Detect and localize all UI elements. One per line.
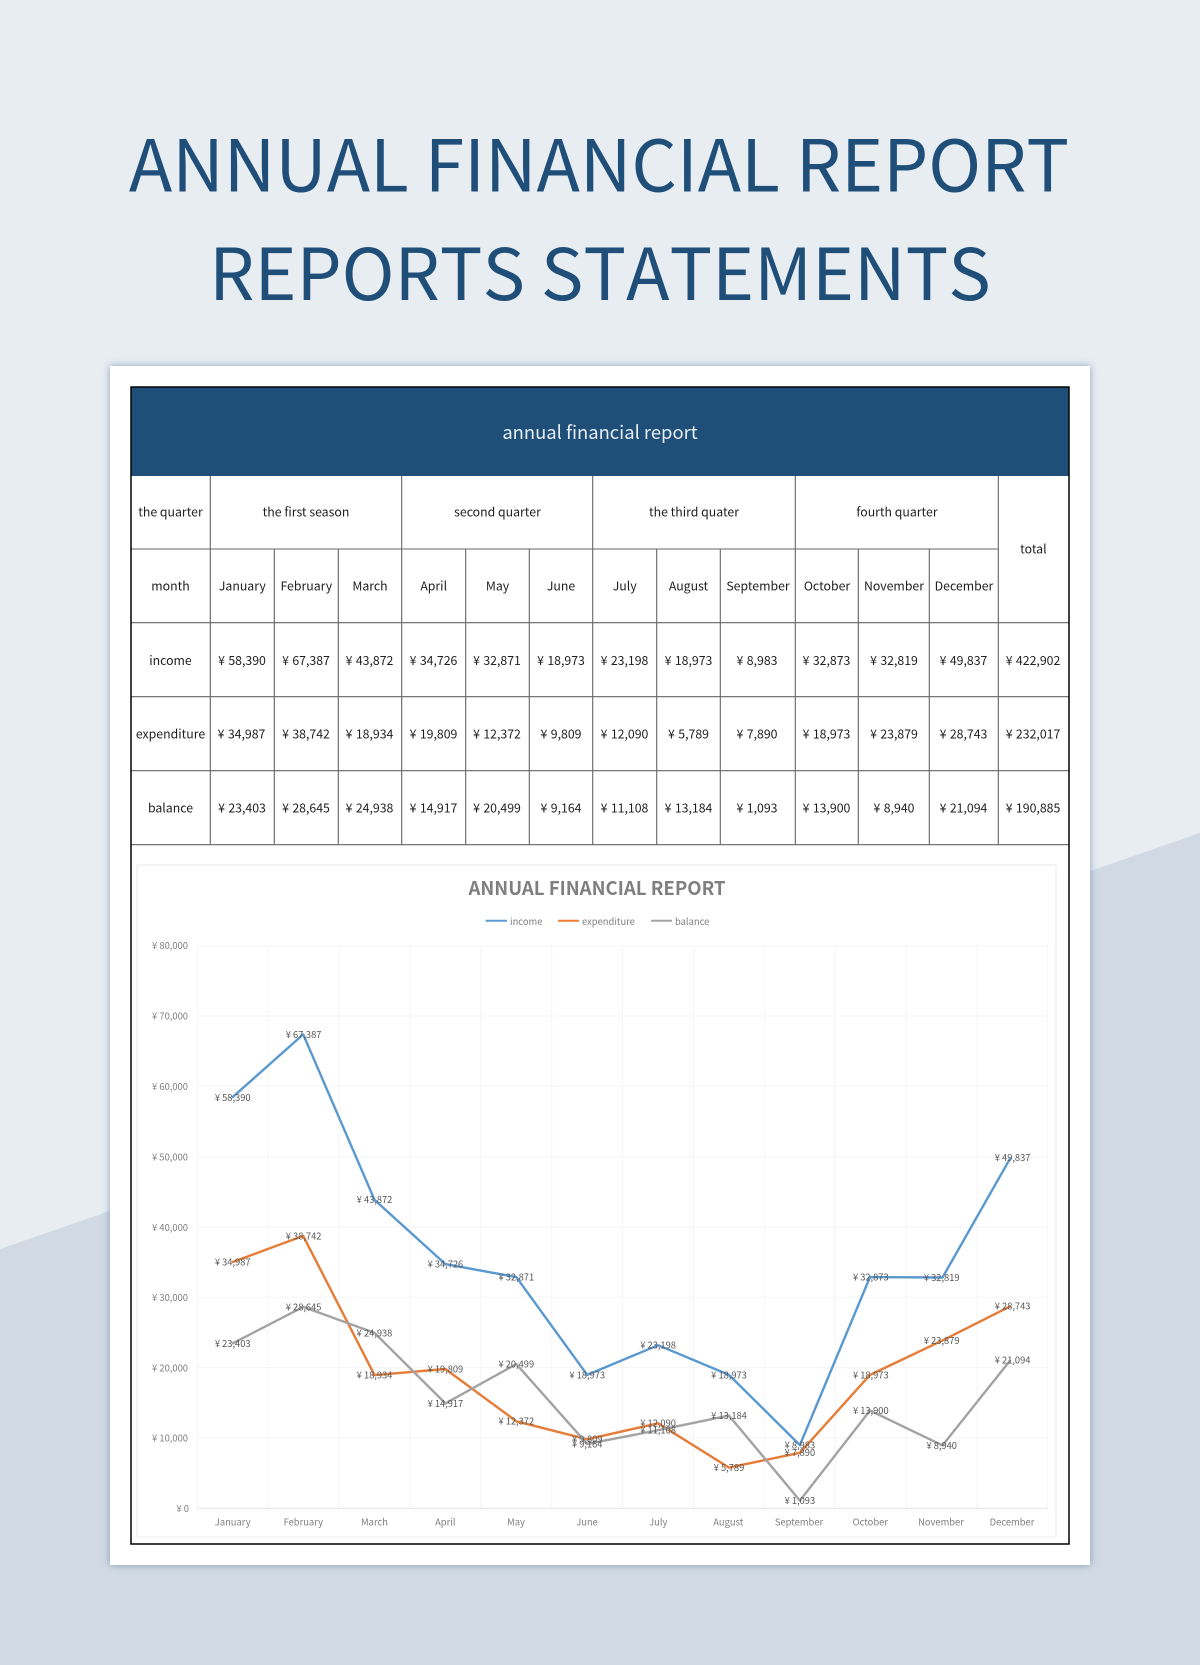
y axis labels: ¥20,000 [152,1361,188,1375]
month row: May [486,577,510,595]
title [129,109,1069,321]
expenditure row: ¥ 232,017 [1006,725,1060,743]
income row: ¥ 34,726 [410,651,458,669]
income row: ¥ 8,983 [737,651,778,669]
expenditure row: ¥ 28,743 [940,725,988,743]
data labels: balance: ¥21,094 [995,1352,1030,1366]
x axis labels: July [649,1514,668,1528]
month row [151,577,994,595]
y axis labels: ¥70,000 [152,1009,188,1023]
month row: July [613,577,637,595]
expenditure row: ¥ 18,973 [803,725,851,743]
data labels: balance: ¥1,093 [785,1493,815,1507]
expenditure row: ¥ 12,372 [473,725,521,743]
expenditure row: ¥ 9,809 [541,725,582,743]
income row: ¥ 23,198 [601,651,649,669]
balance row: balance [148,799,193,817]
title: REPORTS STATEMENTS [209,217,991,321]
month row: March [352,577,388,595]
balance row: ¥ 21,094 [940,799,988,817]
data labels: income [215,1027,1030,1452]
x axis labels: December [990,1514,1035,1528]
x axis labels: April [435,1514,456,1528]
quarter row: the third quater [649,503,739,521]
y axis labels: ¥10,000 [152,1431,188,1445]
x axis labels [215,1514,1035,1528]
income row: ¥ 32,871 [473,651,521,669]
data labels: balance [215,1299,1030,1507]
x axis labels: September [775,1514,824,1528]
y axis labels: ¥40,000 [152,1220,188,1234]
x axis labels: March [361,1514,388,1528]
balance row: ¥ 9,164 [541,799,582,817]
balance row: ¥ 11,108 [601,799,649,817]
month row: September [726,577,790,595]
balance row: ¥ 24,938 [346,799,394,817]
quarter row: the first season [263,503,349,521]
chart title: ANNUAL FINANCIAL REPORT [467,874,726,901]
month row: month [151,577,190,595]
panel: report card [110,366,1090,1565]
month row: August [669,577,709,595]
expenditure row: ¥ 19,809 [410,725,458,743]
data labels: expenditure: ¥19,809 [428,1361,463,1375]
quarter row: the quarter [138,503,203,521]
data labels: expenditure: ¥12,090 [640,1416,676,1430]
chart legend: income [510,914,542,928]
expenditure row: ¥ 12,090 [601,725,649,743]
expenditure row: ¥ 7,890 [737,725,778,743]
balance row: ¥ 1,093 [737,799,778,817]
data labels: balance: ¥13,900 [853,1403,889,1417]
data labels: income: ¥23,198 [640,1338,676,1352]
series: expenditure [232,1236,1010,1468]
data labels: income: ¥18,973 [569,1367,605,1381]
data labels: income: ¥43,872 [357,1192,392,1206]
balance row: ¥ 13,184 [665,799,713,817]
balance row [148,799,1060,817]
x axis labels: October [853,1514,888,1528]
month row: January [219,577,266,595]
x axis labels: May [507,1514,525,1528]
income row: ¥ 32,873 [803,651,851,669]
month row: October [804,577,850,595]
data labels: income: ¥49,837 [995,1150,1030,1164]
chart legend: balance [675,914,709,928]
data labels: expenditure: ¥7,890 [785,1445,815,1459]
balance row: ¥ 23,403 [218,799,266,817]
expenditure row: expenditure [136,725,205,743]
balance row: ¥ 190,885 [1006,799,1060,817]
income row: ¥ 18,973 [665,651,713,669]
month row: April [420,577,447,595]
y axis labels: ¥30,000 [152,1290,188,1304]
chart legend [486,914,709,928]
income row: ¥ 422,902 [1006,651,1060,669]
data labels: balance: ¥9,164 [572,1436,602,1450]
expenditure row: ¥ 18,934 [346,725,394,743]
income row: ¥ 18,973 [537,651,585,669]
expenditure row: ¥ 34,987 [218,725,266,743]
title: ANNUAL FINANCIAL REPORT [129,109,1069,213]
data labels: income: ¥34,726 [428,1256,463,1270]
data labels: balance: ¥23,403 [215,1336,251,1350]
income row: ¥ 58,390 [218,651,266,669]
y axis labels: ¥0 [176,1501,189,1515]
data labels: income: ¥18,973 [711,1367,747,1381]
balance row: ¥ 28,645 [282,799,330,817]
chart legend: expenditure [582,914,635,928]
data labels: expenditure: ¥18,973 [853,1367,889,1381]
data labels: expenditure: ¥34,987 [215,1255,251,1269]
expenditure row: ¥ 5,789 [668,725,709,743]
quarter row: fourth quarter [856,503,938,521]
table banner: annual financial report [502,419,698,445]
data labels: expenditure: ¥28,743 [995,1299,1030,1313]
y axis labels: ¥60,000 [152,1079,188,1093]
balance row: ¥ 14,917 [410,799,458,817]
line chart [137,865,1056,1537]
data labels: expenditure: ¥18,934 [357,1368,392,1382]
data labels: balance: ¥28,645 [286,1299,321,1313]
income row: ¥ 32,819 [870,651,918,669]
income row: ¥ 43,872 [346,651,394,669]
balance row: ¥ 13,900 [803,799,851,817]
data labels: expenditure [215,1228,1030,1474]
data labels: balance: ¥11,108 [640,1423,676,1437]
month row: February [280,577,333,595]
month row: December [935,577,994,595]
x axis labels: January [215,1514,251,1528]
data labels: expenditure: ¥9,809 [572,1432,602,1446]
x axis labels: August [713,1514,744,1528]
data labels: income: ¥8,983 [785,1438,815,1452]
income row [149,651,1060,669]
quarter row: second quarter [454,503,541,521]
data labels: income: ¥67,387 [286,1027,321,1041]
data labels: expenditure: ¥23,879 [924,1333,960,1347]
data labels: income: ¥32,871 [498,1270,534,1284]
data labels: expenditure: ¥5,789 [714,1460,744,1474]
table grid [131,476,1069,845]
data labels: income: ¥32,819 [924,1270,960,1284]
x axis labels: February [284,1514,323,1528]
income row: ¥ 67,387 [282,651,330,669]
series: income [232,1034,1010,1445]
expenditure row: ¥ 38,742 [282,725,330,743]
y axis labels [152,938,189,1515]
data labels: balance: ¥8,940 [926,1438,957,1452]
y axis labels: ¥80,000 [152,938,188,952]
table banner [131,387,1069,476]
balance row: ¥ 20,499 [473,799,521,817]
month row: June [547,577,575,595]
data labels: balance: ¥24,938 [357,1325,392,1339]
data labels: balance: ¥14,917 [428,1396,463,1410]
data labels: income: ¥32,873 [853,1270,889,1284]
balance row: ¥ 8,940 [874,799,915,817]
quarter row [138,503,938,521]
data labels: income: ¥58,390 [215,1090,251,1104]
data labels: expenditure: ¥12,372 [498,1414,534,1428]
month row: November [864,577,924,595]
table outer frame [131,387,1069,1544]
income row: ¥ 49,837 [940,651,988,669]
expenditure row: ¥ 23,879 [870,725,918,743]
income row: income [149,651,192,669]
data labels: expenditure: ¥38,742 [286,1228,321,1242]
y axis labels: ¥50,000 [152,1150,188,1164]
x axis labels: November [918,1514,964,1528]
data labels: balance: ¥20,499 [498,1356,534,1370]
panel: financial table [131,387,1069,1544]
data labels: balance: ¥13,184 [711,1408,747,1422]
series: balance [232,1307,1010,1501]
expenditure row [136,725,1060,743]
total column header: total [1020,540,1047,558]
x axis labels: June [576,1514,598,1528]
